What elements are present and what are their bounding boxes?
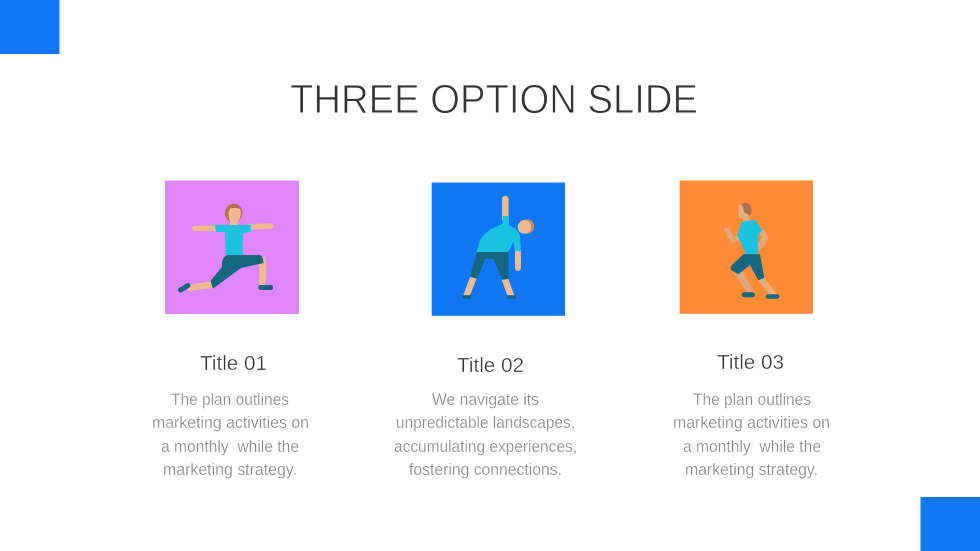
corner block: bottom right	[920, 497, 980, 551]
lowered arm	[515, 252, 521, 268]
text block: option 3: marketing activities on	[673, 414, 830, 432]
heading: title 03: Title 03	[717, 352, 784, 374]
shorts	[470, 252, 509, 280]
shirt	[215, 225, 251, 256]
shorts	[210, 255, 264, 288]
legs	[188, 256, 266, 291]
shirt	[737, 220, 762, 254]
text block: option 1: a monthly while the	[161, 438, 299, 456]
text block: option 1: marketing activities on	[152, 414, 309, 432]
text block: option 3: marketing strategy.	[685, 461, 818, 479]
hair	[225, 204, 242, 222]
raised arm	[502, 199, 509, 219]
face and neck	[228, 208, 241, 226]
text block: option 3: The plan outlines	[693, 391, 811, 409]
corner block: top left	[0, 0, 60, 54]
legs	[463, 277, 514, 295]
icon: man side stretching on blue square	[432, 182, 565, 316]
shirt	[477, 216, 521, 252]
shoes	[462, 295, 516, 299]
text block: option 2: We navigate its	[432, 391, 539, 409]
text block: option 1	[152, 391, 309, 479]
text block: option 2: fostering connections.	[409, 461, 562, 479]
hair	[740, 203, 752, 217]
front leg	[758, 278, 777, 295]
shorts	[731, 254, 764, 280]
shoes	[742, 292, 755, 297]
text block: option 1: marketing strategy.	[163, 461, 297, 479]
icon: woman in lunge pose on purple square	[165, 180, 299, 314]
arms	[195, 226, 271, 228]
text block: option 3: a monthly while the	[683, 438, 821, 456]
title: THREE OPTION SLIDE	[290, 76, 698, 122]
head	[518, 220, 531, 234]
heading: title 01: Title 01	[200, 353, 267, 375]
text block: option 3	[673, 391, 830, 479]
face and neck	[738, 205, 750, 222]
back leg	[733, 270, 755, 293]
text block: option 1: The plan outlines	[171, 391, 289, 409]
text block: option 2: unpredictable landscapes,	[396, 414, 575, 432]
hair	[520, 219, 534, 234]
icon: man walking on orange square	[680, 180, 813, 314]
arms	[727, 230, 766, 248]
shoes	[180, 286, 188, 290]
text block: option 2: accumulating experiences,	[394, 438, 577, 456]
heading: title 02: Title 02	[457, 355, 524, 377]
text block: option 2	[394, 391, 577, 479]
